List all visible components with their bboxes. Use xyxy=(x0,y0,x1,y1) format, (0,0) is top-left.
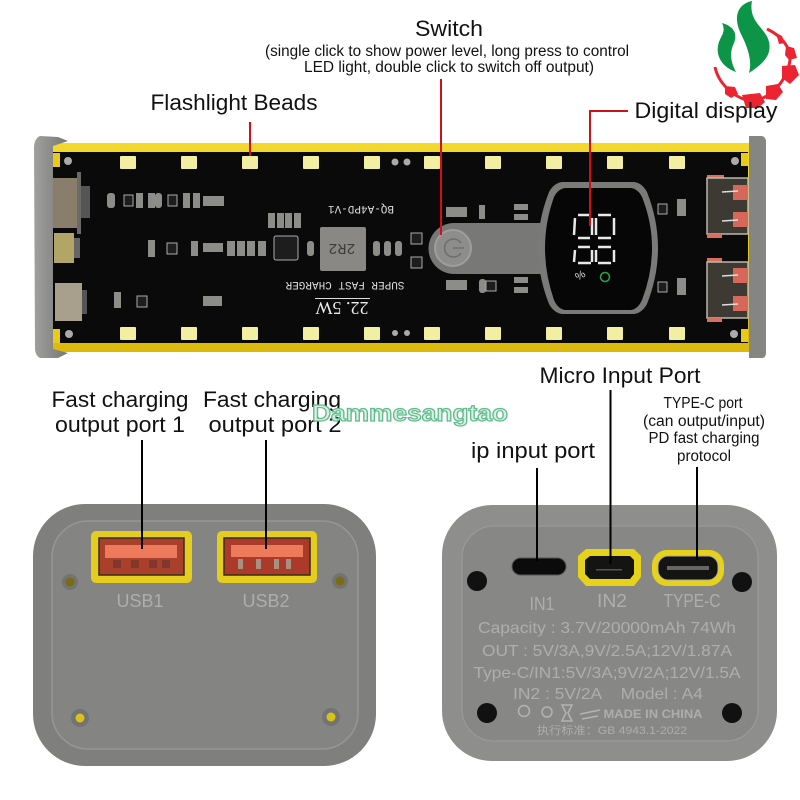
power bank top view xyxy=(34,136,766,358)
flashlight beads top row xyxy=(120,156,685,169)
label: Micro Input Port: Micro Input Port xyxy=(540,363,701,388)
panel: output end xyxy=(33,504,376,766)
label: TYPE-C port: TYPE-C port xyxy=(664,395,743,412)
watermark: Dammesangtao xyxy=(312,400,508,426)
percent sign: % xyxy=(573,268,588,284)
port texts: IN2 xyxy=(597,591,627,611)
arrow: ip input line xyxy=(536,468,538,561)
screws xyxy=(467,571,752,723)
board text 22.5W: 22. 5W xyxy=(316,298,368,318)
specification text: MADE IN CHINA xyxy=(604,707,703,721)
TYPE-C port xyxy=(652,550,724,586)
arrow: display line xyxy=(590,111,628,226)
USB2 port xyxy=(217,531,317,583)
green power icon xyxy=(600,272,610,282)
digital display xyxy=(538,182,658,314)
green flames xyxy=(718,1,770,73)
label: ip input port: ip input port xyxy=(471,438,596,463)
arrow: port 1 line xyxy=(141,440,143,549)
specification text: Capacity : 3.7V/20000mAh 74Wh xyxy=(478,620,736,637)
arrow: type-c line xyxy=(696,467,698,560)
right side USB ports xyxy=(707,175,748,322)
label: output port 2 xyxy=(203,387,342,437)
label: output port 2: Fast charging xyxy=(203,387,341,412)
display digits xyxy=(574,215,614,263)
label: output port 2: output port 2 xyxy=(208,412,342,437)
circuit board xyxy=(53,152,748,343)
board text SUPER FAST CHARGER: SUPER FAST CHARGER xyxy=(285,278,404,290)
label: output port 1: Fast charging xyxy=(52,387,188,412)
USB2 text: USB2 xyxy=(242,591,290,611)
power switch xyxy=(429,223,542,274)
logo: flame and gear xyxy=(715,1,799,108)
board text BQ-A4PD-V1: BQ-A4PD-V1 xyxy=(328,202,394,214)
specification text: IN2 : 5V/2A Model : A4 xyxy=(513,686,703,703)
label: TYPE-C port: protocol xyxy=(677,448,731,465)
USB1 port xyxy=(91,531,192,583)
arrow: port 2 line xyxy=(265,440,267,549)
label: Switch: Switch xyxy=(415,16,483,41)
label: TYPE-C port: PD fast charging xyxy=(648,430,760,447)
left side ports xyxy=(53,172,90,321)
port texts: TYPE-C xyxy=(664,591,720,611)
label: TYPE-C port xyxy=(643,395,765,465)
USB1 text: USB1 xyxy=(116,591,164,611)
label: Digital display: Digital display xyxy=(634,98,778,123)
specification text xyxy=(474,620,741,737)
inductor 2R2: 2R2 xyxy=(328,239,356,256)
IN2 port xyxy=(578,549,641,586)
certification marks xyxy=(518,705,600,721)
label: output port 1: output port 1 xyxy=(55,412,185,437)
IN1 port xyxy=(512,558,566,575)
panel: input end xyxy=(442,505,777,761)
red gear xyxy=(715,29,790,101)
port texts xyxy=(530,591,720,614)
inductor 2R2 xyxy=(320,227,366,271)
corner and via dots xyxy=(64,157,739,338)
label: output port 1 xyxy=(52,387,188,437)
yellow casing xyxy=(52,143,750,352)
label: Switch: (single click to show power level, long press to control xyxy=(265,43,629,60)
label: TYPE-C port: (can output/input) xyxy=(643,413,765,430)
flashlight beads bottom row xyxy=(120,327,685,340)
port texts: IN1 xyxy=(530,594,554,614)
yellow corner blocks xyxy=(53,153,748,343)
chips xyxy=(124,195,667,307)
label: Switch xyxy=(265,16,629,76)
label: Flashlight Beads: Flashlight Beads xyxy=(150,90,318,115)
arrow: switch line xyxy=(440,79,442,235)
label: Switch: LED light, double click to switch off output) xyxy=(304,59,594,76)
arrow: micro input line xyxy=(610,390,612,564)
right end cap xyxy=(749,136,766,358)
left end cap xyxy=(34,136,68,358)
screw holes xyxy=(62,573,348,727)
specification text: 执行标准：GB 4943.1-2022 xyxy=(537,723,687,737)
specification text: OUT : 5V/3A,9V/2.5A;12V/1.87A xyxy=(482,643,732,660)
arrow: flashlight line xyxy=(249,122,251,156)
small surface components xyxy=(107,193,686,308)
specification text: Type-C/IN1:5V/3A;9V/2A;12V/1.5A xyxy=(474,665,741,682)
